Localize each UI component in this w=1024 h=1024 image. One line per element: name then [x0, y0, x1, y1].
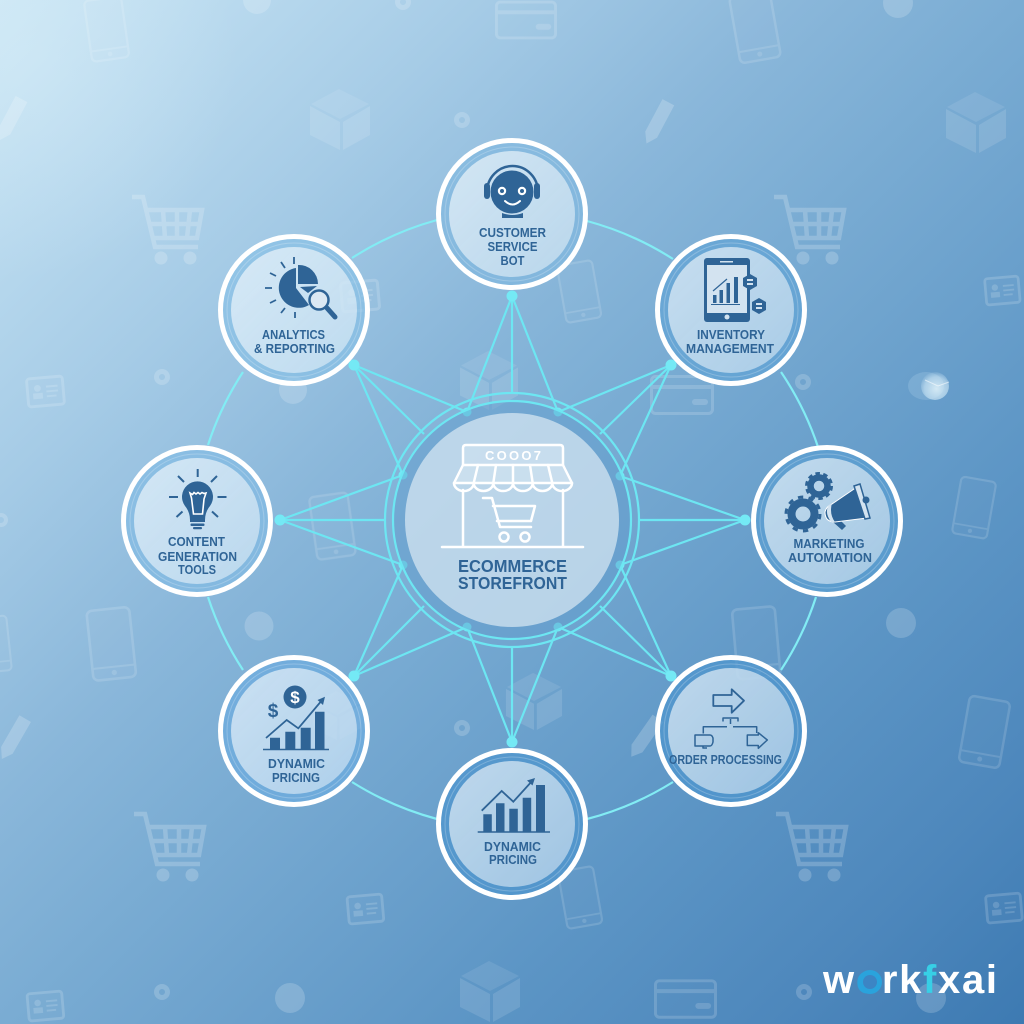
label: CUSTOMER — [479, 225, 547, 240]
label: INVENTORY — [697, 327, 765, 342]
storefront sign: COOO7 — [485, 448, 541, 463]
label: DYNAMIC — [268, 756, 326, 771]
label — [686, 327, 774, 356]
label: & REPORTING — [254, 341, 335, 356]
background pattern: pencils — [0, 96, 674, 762]
background pattern: boxes — [310, 89, 1006, 1022]
icon: rising bar chart — [478, 778, 550, 832]
sparkle bubble — [908, 372, 949, 400]
node: order processing — [658, 658, 804, 804]
central hub: ecommerce storefront — [385, 393, 639, 647]
label: AUTOMATION — [788, 550, 872, 565]
label: DYNAMIC — [484, 839, 542, 854]
icon: dollar coin and chart: $ — [290, 688, 300, 707]
background pattern: credit cards — [496, 2, 716, 1017]
icon: dollar coin and chart — [263, 686, 329, 750]
label: ANALYTICS — [262, 327, 325, 342]
hub label — [458, 556, 567, 593]
icon: lightbulb — [169, 469, 226, 529]
background pattern: small cards — [26, 276, 1022, 1021]
label: GENERATION — [158, 549, 237, 564]
hub label: STOREFRONT — [458, 573, 567, 593]
label — [484, 839, 542, 867]
label: MARKETING — [794, 536, 864, 551]
hub label: ECOMMERCE — [458, 556, 567, 576]
label — [479, 225, 547, 268]
connector dots — [274, 290, 750, 748]
node: customer service bot — [438, 140, 586, 288]
label — [268, 756, 326, 785]
label: BOT — [500, 253, 525, 268]
node: marketing automation — [754, 448, 900, 594]
label: ORDER PROCESSING — [669, 752, 782, 767]
logo: workfxai: workfxai — [822, 958, 997, 1002]
label — [158, 534, 237, 577]
icon: dollar coin and chart: $ — [268, 701, 279, 722]
label — [788, 536, 872, 565]
network connectors — [208, 220, 818, 819]
icon: pie chart and magnifier — [265, 257, 335, 318]
icon: order flow arrows — [695, 689, 767, 748]
label: PRICING — [272, 770, 320, 785]
icon: tablet with chart — [704, 258, 766, 322]
spokes — [467, 296, 558, 412]
label: TOOLS — [178, 562, 216, 577]
label: SERVICE — [488, 239, 538, 254]
node: inventory management — [658, 236, 804, 384]
icon: gears and megaphone — [786, 474, 870, 531]
label — [254, 327, 335, 356]
icon: robot head with headset — [484, 166, 540, 218]
label: PRICING — [489, 852, 537, 867]
label: CONTENT — [168, 534, 225, 549]
node: dynamic pricing (dollar chart) — [220, 658, 368, 804]
label: MANAGEMENT — [686, 341, 774, 356]
node: analytics and reporting — [220, 236, 368, 384]
node: dynamic pricing (bar chart) — [438, 750, 586, 898]
background pattern: shopping carts — [132, 197, 846, 882]
node: content generation tools — [124, 448, 270, 594]
icon: storefront — [442, 445, 583, 547]
outer ring arcs — [208, 220, 818, 819]
